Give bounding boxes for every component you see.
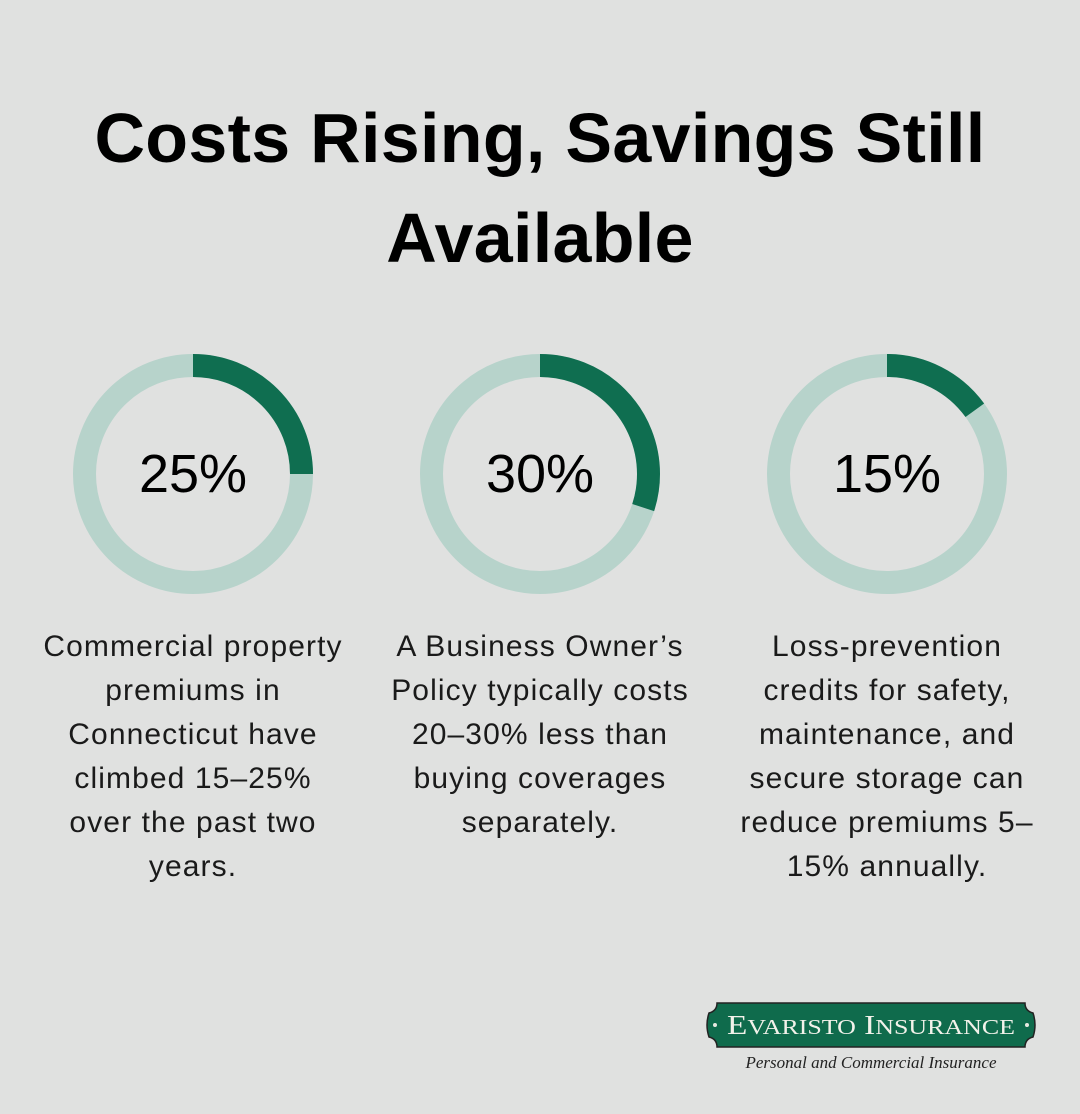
text: col 1 <box>43 630 343 883</box>
ring: 15% <box>767 354 1007 594</box>
title: Available <box>386 199 694 277</box>
text: col 1: Commercial property <box>43 630 343 663</box>
text: col 1: Connecticut have <box>68 718 318 751</box>
text: col 2: buying coverages <box>414 762 666 795</box>
text: col 3: credits for safety, <box>763 674 1011 707</box>
logo <box>706 1002 1036 1072</box>
text: col 3: 15% annually. <box>787 850 987 883</box>
text: col 3: secure storage can <box>750 762 1024 795</box>
text: col 2: Policy typically costs <box>391 674 689 707</box>
text: col 2: A Business Owner’s <box>396 630 684 663</box>
text: col 3: reduce premiums 5– <box>740 806 1034 839</box>
text: col 3: Loss-prevention <box>772 630 1002 663</box>
text: col 1: premiums in <box>105 674 281 707</box>
ring: 25%: 25% <box>139 444 247 504</box>
logo: Personal and Commercial Insurance <box>745 1053 997 1072</box>
text: col 2: separately. <box>462 806 618 839</box>
text: col 1: years. <box>149 850 237 883</box>
ring: 30%: 30% <box>486 444 594 504</box>
ring: 30% <box>420 354 660 594</box>
text: col 1: over the past two <box>69 806 317 839</box>
text: col 3 <box>740 630 1034 883</box>
ring: 25% <box>73 354 313 594</box>
title: Costs Rising, Savings Still <box>94 99 986 177</box>
ring: 15%: 15% <box>833 444 941 504</box>
text: col 2 <box>391 630 689 839</box>
text: col 2: 20–30% less than <box>412 718 668 751</box>
logo: EVARISTO INSURANCE <box>727 1010 1015 1040</box>
title <box>94 99 986 277</box>
text: col 1: climbed 15–25% <box>74 762 312 795</box>
text: col 3: maintenance, and <box>759 718 1015 751</box>
